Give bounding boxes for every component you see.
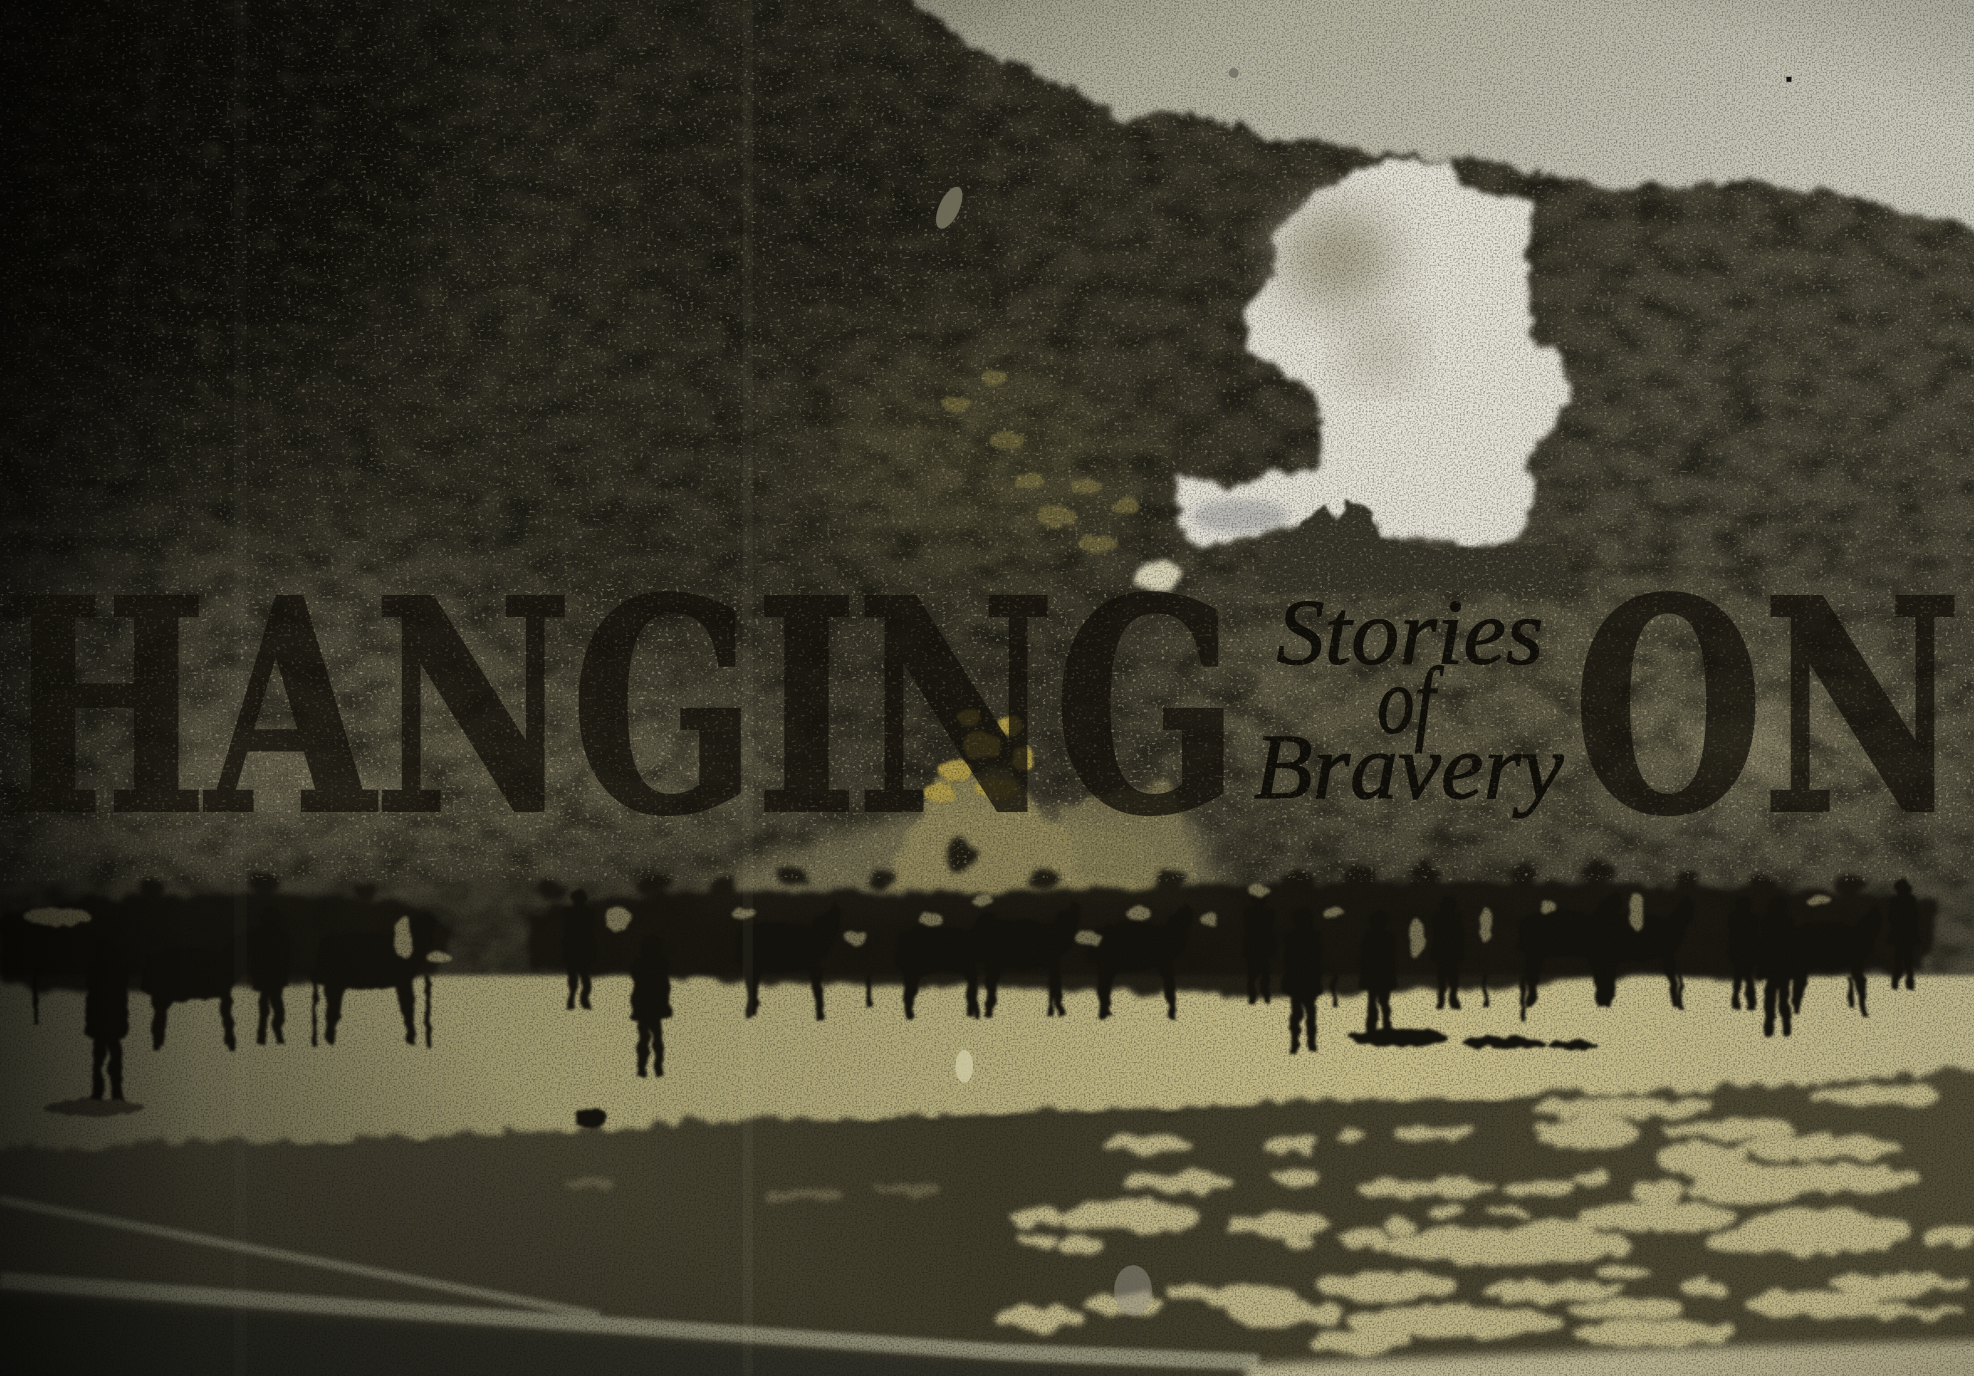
soldiers and horses on the beach bbox=[35, 879, 1919, 1128]
subtitle word: Bravery: Bravery bbox=[1254, 716, 1564, 819]
title distress speckle bbox=[0, 585, 1974, 825]
sky bbox=[862, 0, 1974, 239]
wooded hillside bbox=[0, 0, 1974, 995]
title: Hanging: HANGING bbox=[3, 536, 1239, 878]
light rails along bottom of photo bbox=[0, 1200, 1259, 1362]
subtitle: Stories of Bravery: Stories bbox=[1277, 581, 1543, 684]
sunlight dapples bbox=[569, 1089, 1974, 1351]
crowd mass on the beach bbox=[0, 841, 1939, 995]
subtitle: Stories of Bravery bbox=[1254, 581, 1564, 819]
tree shadow on beach bbox=[0, 1070, 1974, 1376]
foreground band bbox=[0, 1294, 1272, 1376]
shell burst smoke bbox=[1176, 159, 1567, 550]
subtitle word: of: of bbox=[1377, 648, 1444, 754]
sandy beach bbox=[0, 976, 1974, 1158]
light on hats and backs bbox=[24, 886, 1830, 962]
trees in front of smoke bbox=[1259, 499, 1586, 592]
